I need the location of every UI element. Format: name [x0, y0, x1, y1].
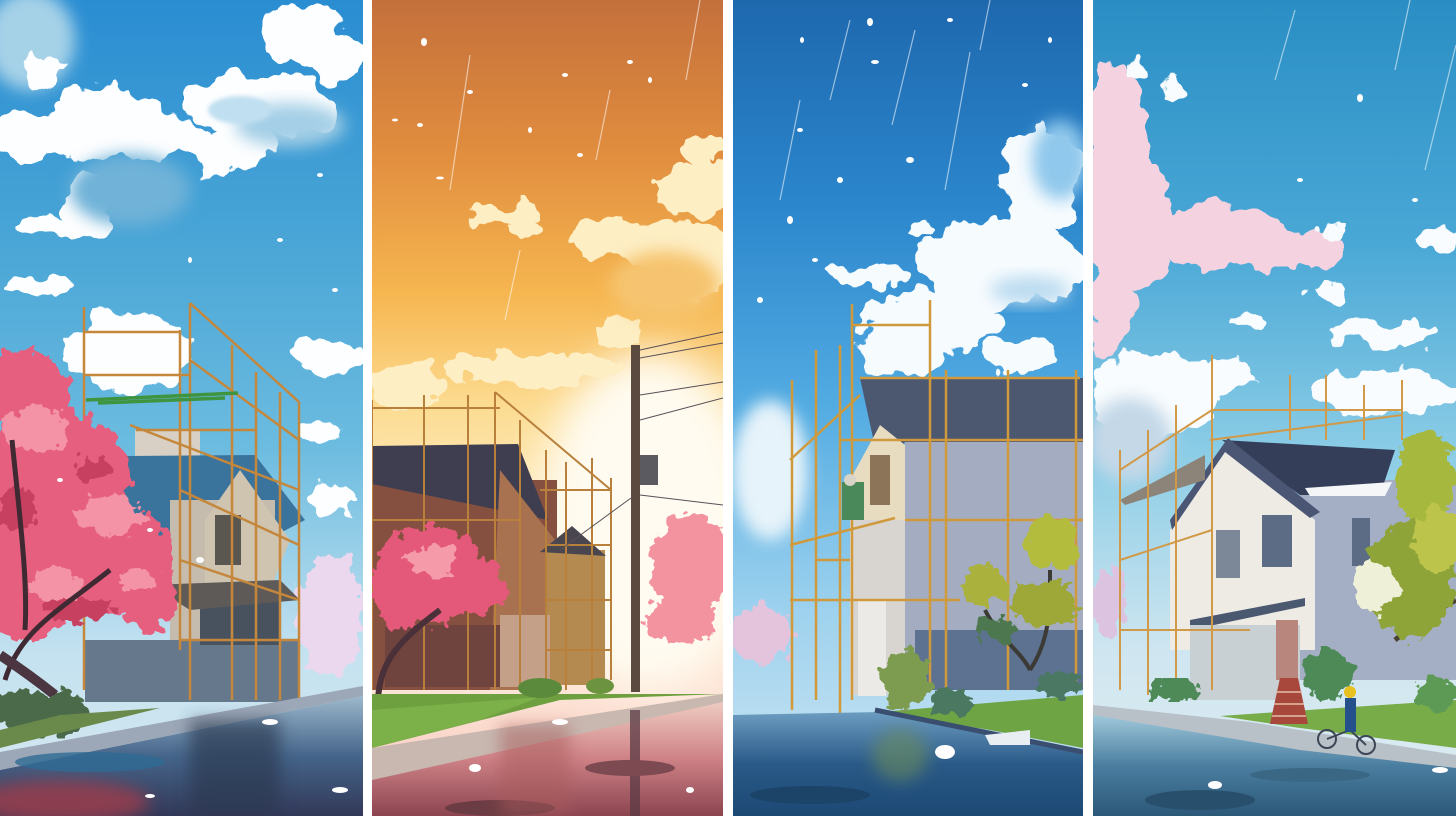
clouds — [732, 120, 1088, 540]
pink tree centre — [372, 527, 508, 700]
white house with solar roof — [1120, 438, 1456, 700]
grass — [1220, 700, 1456, 748]
pink cherry tree — [0, 350, 180, 695]
house — [85, 430, 305, 702]
distant pale tree — [296, 553, 364, 677]
panel: cherry blossom sky house — [0, 0, 370, 816]
red step ladder — [1270, 678, 1308, 724]
scaffold — [84, 303, 299, 700]
clouds — [1077, 58, 1456, 482]
distant pink tree — [732, 605, 792, 665]
panel: deep blue sky house — [732, 0, 1088, 816]
green plank on scaffold — [86, 393, 238, 403]
scaffold — [790, 300, 1083, 715]
grass — [880, 695, 1083, 748]
grass strip — [0, 690, 160, 748]
panel: pink cloud sky house — [1077, 0, 1456, 816]
yellow-green tree — [1351, 430, 1456, 640]
panel: orange sunset sky house — [370, 0, 760, 816]
shrubs and topiary — [882, 517, 1081, 716]
sun glow — [540, 350, 760, 690]
distant pink tree — [1090, 566, 1126, 634]
grass — [372, 678, 723, 748]
shrubs — [1145, 651, 1456, 710]
clouds: golden — [370, 134, 735, 411]
grey house — [850, 378, 1083, 696]
scaffold — [1120, 355, 1402, 695]
brown scaffolded building — [372, 444, 606, 690]
pink tree right — [644, 513, 730, 644]
worker — [842, 474, 864, 520]
wet road — [372, 694, 723, 816]
clouds: upper left mass — [0, 0, 370, 514]
wet road — [1093, 705, 1456, 816]
utility pole with wires — [560, 332, 723, 692]
scaffold — [372, 392, 611, 690]
wet road — [0, 686, 363, 816]
wet road — [733, 710, 1083, 816]
cyclist — [1318, 686, 1375, 754]
